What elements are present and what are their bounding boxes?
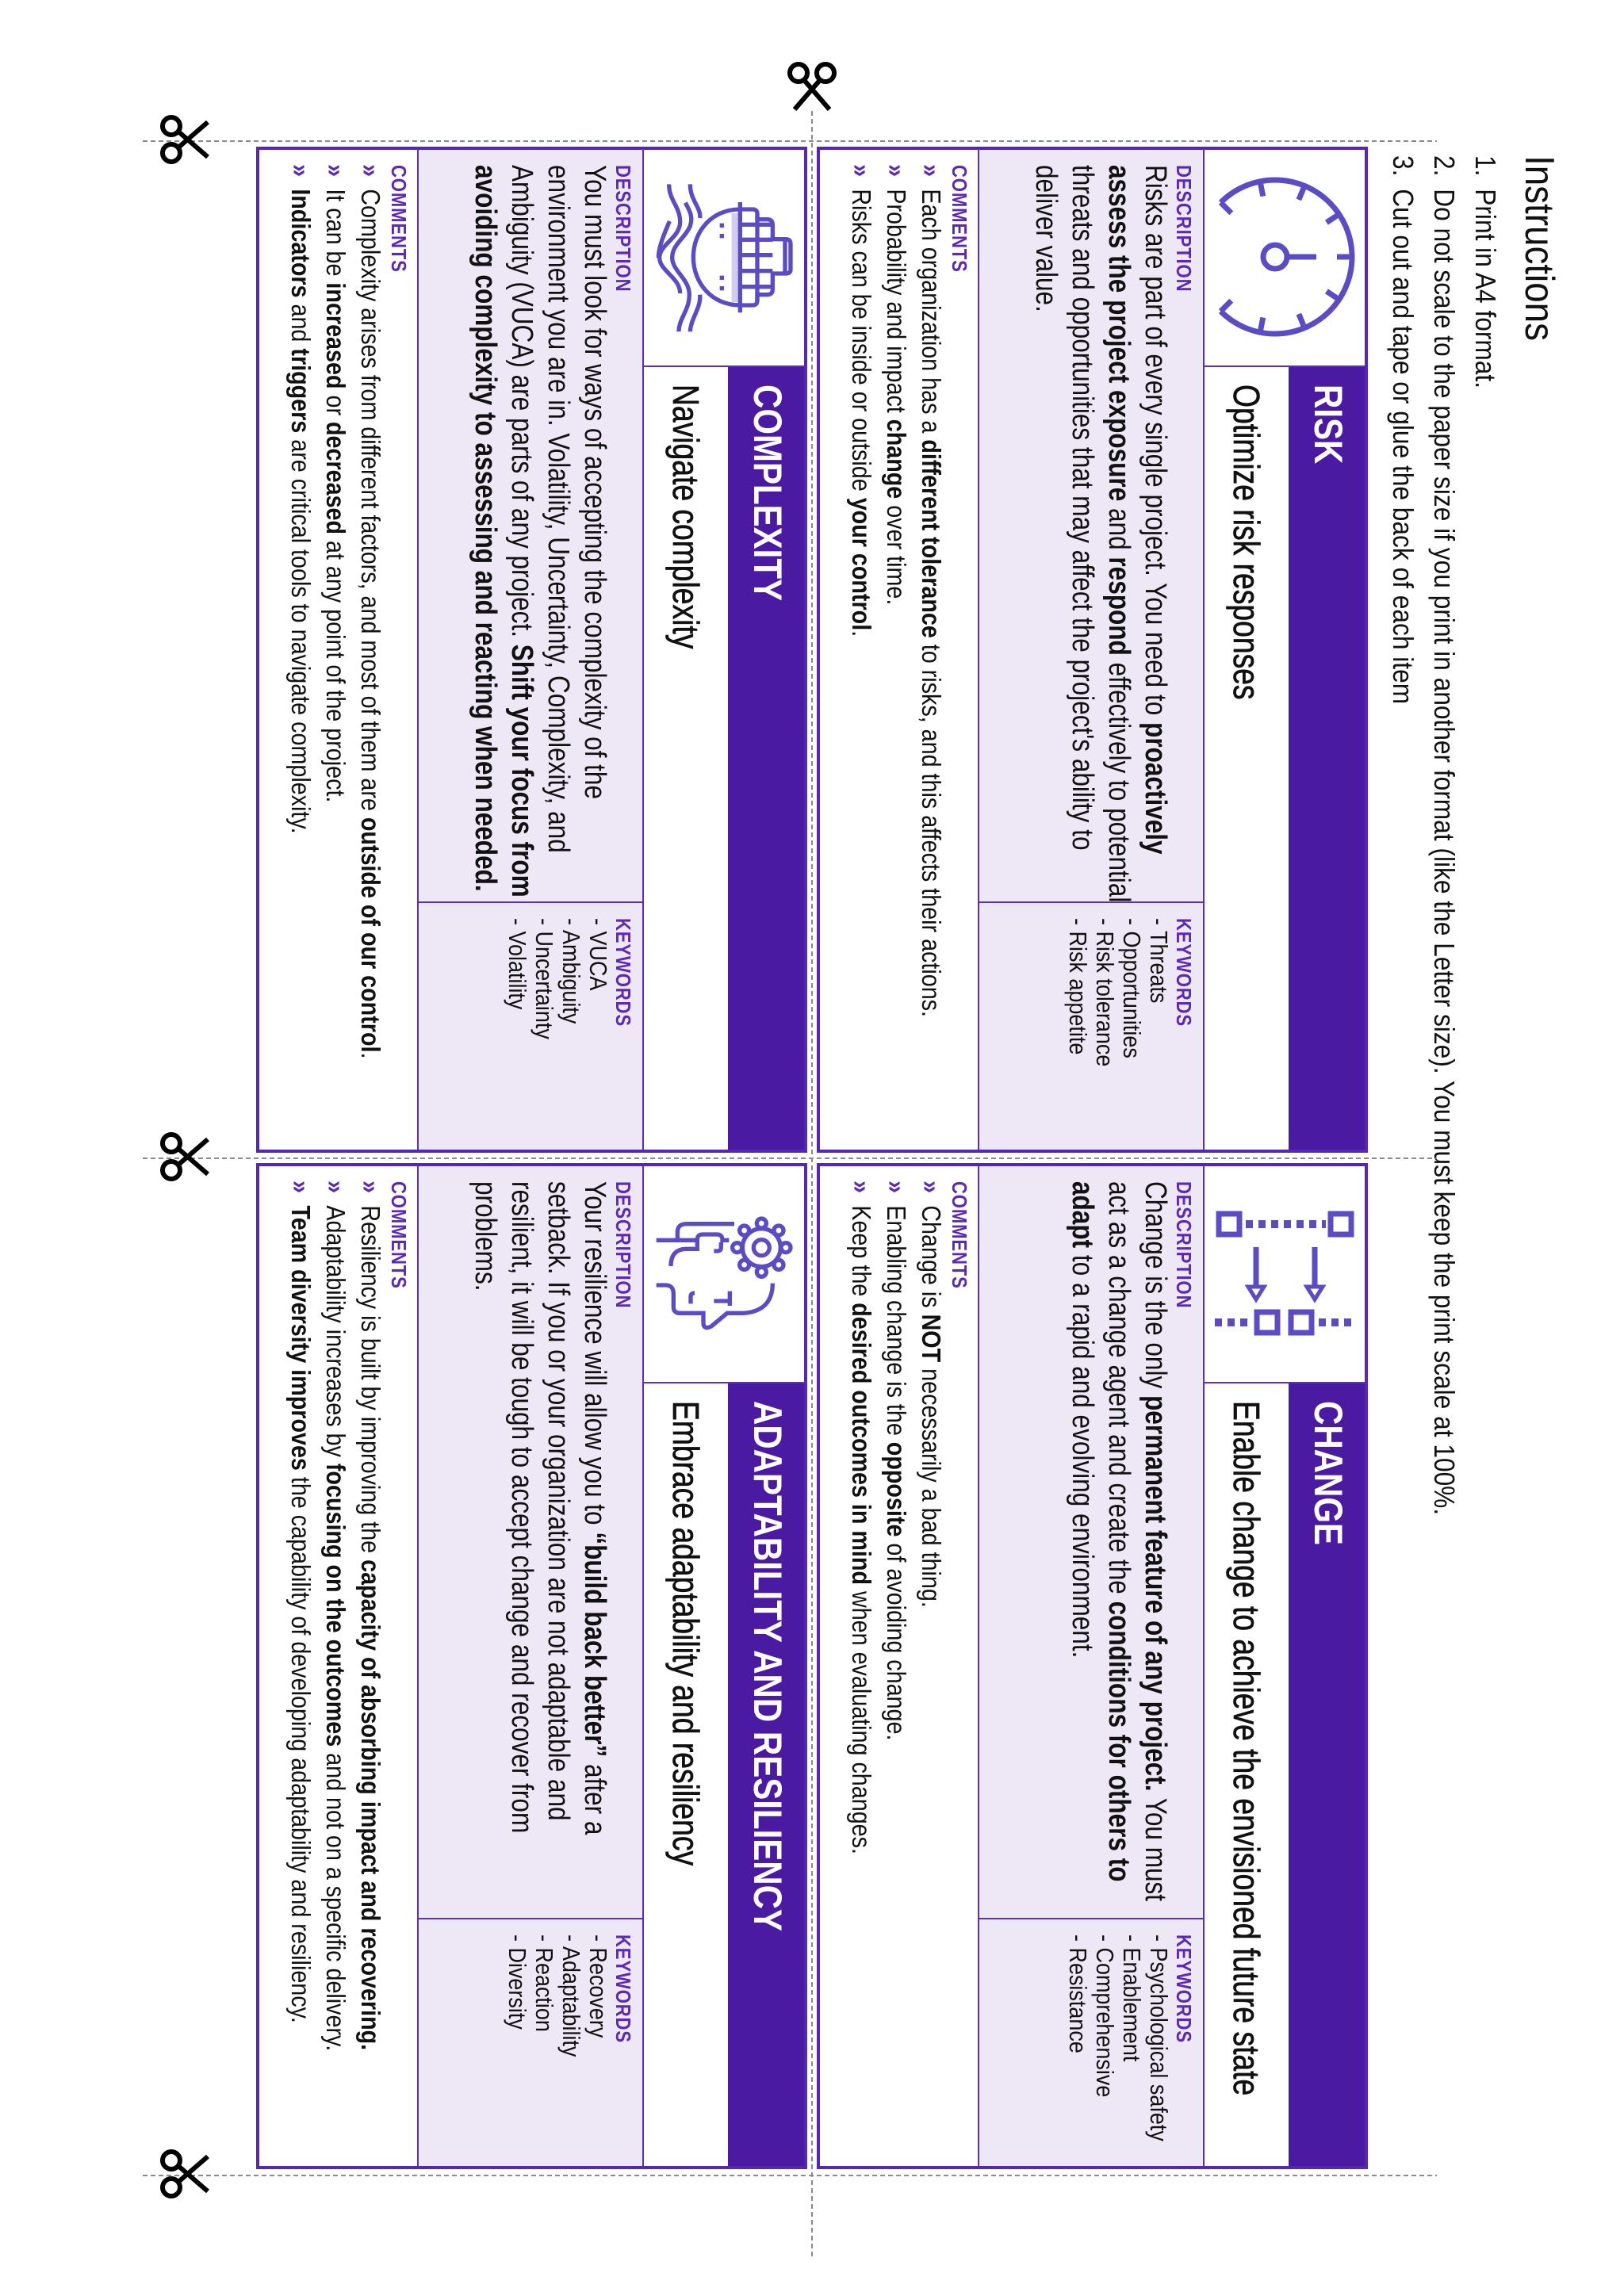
icon: scissors row 2 <box>163 1135 208 1179</box>
risk description text: assess the project exposure and respond effectively to potential <box>1102 165 1136 902</box>
instruction list: Cut out and tape or glue the back of each item <box>1387 189 1419 704</box>
instruction list: 3. <box>1387 155 1419 176</box>
change keywords list: - Resistance <box>1064 1934 1092 2053</box>
adaptability comments: » <box>286 1181 316 1193</box>
adaptability comments <box>286 1181 385 2051</box>
complexity subtitle: Navigate complexity <box>665 385 707 649</box>
risk description text <box>1029 165 1172 902</box>
complexity description text <box>469 165 611 897</box>
change keywords label: KEYWORDS <box>1172 1934 1196 2043</box>
risk keywords list: - Risk tolerance <box>1091 918 1119 1066</box>
risk keywords list <box>1064 918 1173 1066</box>
instruction list: Print in A4 format. <box>1469 189 1502 388</box>
instruction list: Do not scale to the paper size if you print in another format (like the Letter size). You must keep the print scale at 100%. <box>1428 189 1461 1515</box>
complexity keywords list: - Uncertainty <box>530 918 558 1039</box>
change keywords list <box>1064 1934 1173 2141</box>
complexity description text: environment you are in. Volatility, Uncertainty, Complexity, and <box>542 165 575 853</box>
change keywords list: - Comprehensive <box>1091 1934 1119 2097</box>
adaptability keywords label: KEYWORDS <box>611 1934 635 2043</box>
risk keywords label: KEYWORDS <box>1172 918 1196 1027</box>
change comments: Enabling change is the opposite of avoiding change. <box>882 1205 911 1740</box>
card: risk <box>817 147 1368 1153</box>
adaptability comments: Resiliency is built by improving the capacity of absorbing impact and recovering. <box>356 1205 385 2050</box>
complexity comments: Complexity arises from different factors, and most of them are outside of our control . <box>356 189 385 1058</box>
adaptability keywords list: - Reaction <box>530 1934 558 2032</box>
change description text <box>1066 1181 1172 1901</box>
instruction list: 2. <box>1428 155 1461 176</box>
card: complexity <box>256 147 807 1153</box>
adaptability description panel <box>417 1163 644 2169</box>
complexity description text: You must look for ways of accepting the complexity of the <box>578 165 611 799</box>
adaptability comments: Team diversity improves the capability of developing adaptability and resiliency. <box>286 1205 316 2023</box>
complexity comments: » <box>321 164 350 177</box>
adaptability subtitle: Embrace adaptability and resiliency <box>665 1401 707 1866</box>
complexity comments: It can be increased or decreased at any point of the project. <box>321 189 350 802</box>
card: adaptability <box>256 1163 807 2169</box>
complexity comments <box>286 164 385 1058</box>
adaptability description text: resilient, it will be tough to accept change and recover from <box>505 1181 538 1833</box>
risk keywords list: - Opportunities <box>1118 918 1146 1058</box>
icon: risk gauge <box>1220 180 1352 334</box>
change comments: » <box>882 1181 911 1193</box>
risk comments: » <box>847 164 876 177</box>
change comments: Change is NOT necessarily a bad thing. <box>917 1205 946 1608</box>
icon: change flow <box>1215 1214 1355 1333</box>
risk subtitle: Optimize risk responses <box>1226 385 1267 700</box>
risk description text: threats and opportunities that may affect the project's ability to <box>1066 165 1099 851</box>
adaptability comments label: COMMENTS <box>387 1181 411 1289</box>
change description panel <box>978 1163 1205 2169</box>
risk comments: » <box>882 164 911 177</box>
complexity keywords label: KEYWORDS <box>611 918 635 1027</box>
risk title: RISK <box>1306 385 1350 464</box>
complexity description panel <box>417 147 644 1153</box>
complexity description text: Ambiguity (VUCA) are parts of any project. Shift your focus from <box>505 165 538 897</box>
complexity comments: Indicators and triggers are critical tools to navigate complexity. <box>286 189 316 834</box>
complexity title band <box>728 367 807 1153</box>
change description text: act as a change agent and create the conditions for others to <box>1102 1181 1136 1882</box>
complexity title: COMPLEXITY <box>745 385 790 601</box>
instruction list: 1. <box>1469 155 1502 176</box>
change title band <box>1289 1383 1368 2169</box>
complexity keywords list: - Ambiguity <box>557 918 585 1024</box>
adaptability description text: Your resilience will allow you to “build back better” after a <box>578 1181 611 1835</box>
complexity description text: avoiding complexity to assessing and reacting when needed. <box>469 165 502 892</box>
risk comments label: COMMENTS <box>948 165 971 273</box>
change keywords list: - Psychological safety <box>1145 1934 1173 2141</box>
adaptability comments: » <box>356 1181 385 1193</box>
change comments: » <box>917 1181 946 1193</box>
adaptability comments: » <box>321 1181 350 1193</box>
change description text: adapt to a rapid and evolving environment. <box>1066 1181 1099 1658</box>
adaptability title: ADAPTABILITY AND RESILIENCY <box>745 1401 790 1931</box>
risk title band <box>1289 367 1368 1153</box>
complexity comments label: COMMENTS <box>387 165 411 273</box>
complexity comments: » <box>286 164 316 177</box>
instruction list <box>1387 155 1502 1515</box>
adaptability keywords list: - Adaptability <box>557 1934 585 2057</box>
complexity keywords list <box>504 918 612 1039</box>
icon: scissors row 1 <box>163 117 208 162</box>
adaptability keywords list <box>504 1934 612 2057</box>
adaptability description text: setback. If you or your organization are not adaptable and <box>542 1181 575 1821</box>
complexity description label: DESCRIPTION <box>611 165 635 292</box>
change description label: DESCRIPTION <box>1172 1181 1196 1308</box>
change title: CHANGE <box>1306 1401 1350 1545</box>
instructions title: Instructions <box>1516 155 1562 341</box>
complexity keywords list: - VUCA <box>584 918 612 990</box>
icon: scissors top <box>790 64 834 109</box>
change keywords list: - Enablement <box>1118 1934 1146 2061</box>
change subtitle: Enable change to achieve the envisioned future state <box>1226 1401 1267 2095</box>
risk description text: Risks are part of every single project. You need to proactively <box>1139 165 1172 855</box>
risk keywords list: - Risk appetite <box>1064 918 1092 1054</box>
complexity keywords list: - Volatility <box>504 918 531 1009</box>
change description text: Change is the only permanent feature of any project. You must <box>1139 1181 1172 1901</box>
risk comments: Risks can be inside or outside your control . <box>847 189 876 637</box>
change comments: » <box>847 1181 876 1193</box>
adaptability title band <box>728 1383 807 2169</box>
icon: complexity iceberg head <box>658 184 791 331</box>
risk description text: deliver value. <box>1029 165 1063 312</box>
icon: adaptability head with gear <box>657 1219 791 1328</box>
adaptability keywords list: - Diversity <box>504 1934 531 2030</box>
change comments: Keep the desired outcomes in mind when evaluating changes. <box>847 1205 876 1854</box>
adaptability comments: Adaptability increases by focusing on the outcomes and not on a specific delivery. <box>321 1205 350 2051</box>
change comments label: COMMENTS <box>948 1181 971 1289</box>
risk description label: DESCRIPTION <box>1172 165 1196 292</box>
change comments <box>847 1181 946 1854</box>
risk comments <box>847 164 946 1017</box>
adaptability keywords list: - Recovery <box>584 1934 612 2038</box>
adaptability description text: problems. <box>469 1181 502 1291</box>
risk comments: Each organization has a different tolerance to risks, and this affects their actions. <box>917 189 946 1017</box>
risk keywords list: - Threats <box>1145 918 1173 1003</box>
risk description panel <box>978 147 1205 1153</box>
adaptability description text <box>469 1181 611 1835</box>
adaptability description label: DESCRIPTION <box>611 1181 635 1308</box>
card: change <box>817 1163 1368 2169</box>
complexity comments: » <box>356 164 385 177</box>
instructions <box>1387 155 1562 1515</box>
risk comments: » <box>917 164 946 177</box>
icon: scissors row 3 <box>163 2152 208 2196</box>
risk comments: Probability and impact change over time. <box>882 189 911 605</box>
